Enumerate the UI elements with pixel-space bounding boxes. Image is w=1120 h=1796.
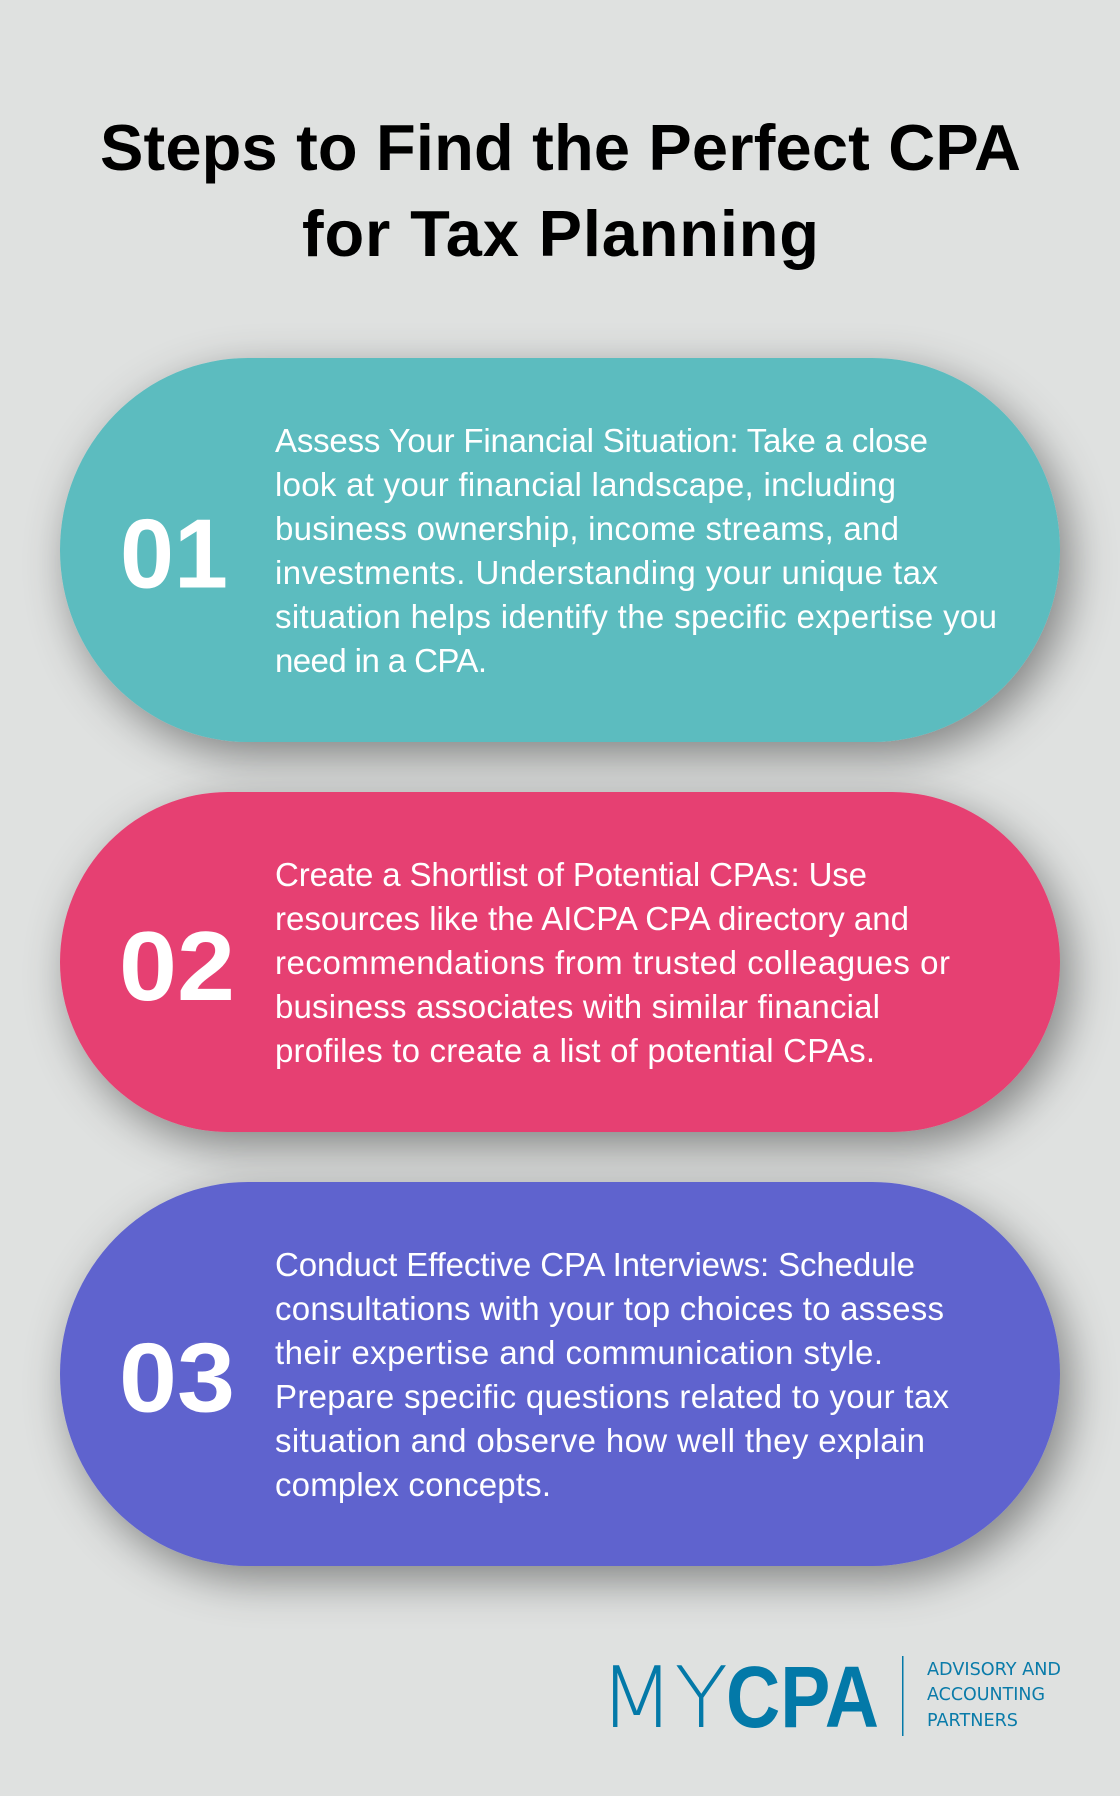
title <box>100 111 1021 270</box>
text: step 03 description: their expertise and communication style. <box>275 1334 883 1371</box>
panel: step 01 <box>60 358 1060 742</box>
text: step 02 description: profiles to create a list of potential CPAs. <box>275 1032 875 1069</box>
title: Steps to Find the Perfect CPA <box>100 111 1021 184</box>
logo: MYCPA <box>599 1649 1061 1748</box>
panel: step 03 <box>60 1182 1060 1566</box>
logo divider <box>902 1656 904 1736</box>
logo tagline: PARTNERS <box>927 1711 1018 1731</box>
panel: step 02 <box>60 792 1060 1132</box>
text: step 01 description: look at your financial landscape, including <box>275 466 896 503</box>
pill: step 02 background <box>60 792 1060 1132</box>
text: step 02 description: business associates with similar financial <box>275 988 880 1025</box>
text: step 01 description: situation helps identify the specific expertise you <box>275 598 997 635</box>
logo tagline <box>927 1660 1061 1731</box>
title: for Tax Planning <box>302 197 819 270</box>
text: step 03 description: situation and observe how well they explain <box>275 1422 925 1459</box>
text: step 02 description: recommendations from trusted colleagues or <box>275 944 950 981</box>
number: 03: 03 <box>119 1322 235 1432</box>
text: step 02 description: resources like the AICPA CPA directory and <box>275 900 909 937</box>
text: step 01 description: need in a CPA. <box>275 642 487 679</box>
logo wordmark: MY: MY <box>599 1649 728 1748</box>
text: step 03 description: consultations with your top choices to assess <box>275 1290 944 1327</box>
text: step 03 description <box>275 1246 950 1503</box>
pill: step 01 background <box>60 358 1060 742</box>
text: step 01 description: investments. Understanding your unique tax <box>275 554 938 591</box>
text: step 01 description: business ownership, income streams, and <box>275 510 899 547</box>
text: step 03 description: Conduct Effective CPA Interviews: Schedule <box>275 1246 915 1283</box>
text: step 03 description: complex concepts. <box>275 1466 551 1503</box>
text: step 01 description <box>275 422 997 679</box>
logo tagline: ADVISORY AND <box>927 1660 1061 1680</box>
text: step 02 description <box>275 856 950 1069</box>
number: 02: 02 <box>119 911 235 1021</box>
logo tagline: ACCOUNTING <box>927 1685 1045 1705</box>
text: step 03 description: Prepare specific questions related to your tax <box>275 1378 950 1415</box>
logo wordmark: CPA: CPA <box>726 1649 879 1746</box>
text: step 01 description: Assess Your Financial Situation: Take a close <box>275 422 928 459</box>
number: 01: 01 <box>120 498 228 608</box>
pill: step 03 background <box>60 1182 1060 1566</box>
text: step 02 description: Create a Shortlist of Potential CPAs: Use <box>275 856 867 893</box>
